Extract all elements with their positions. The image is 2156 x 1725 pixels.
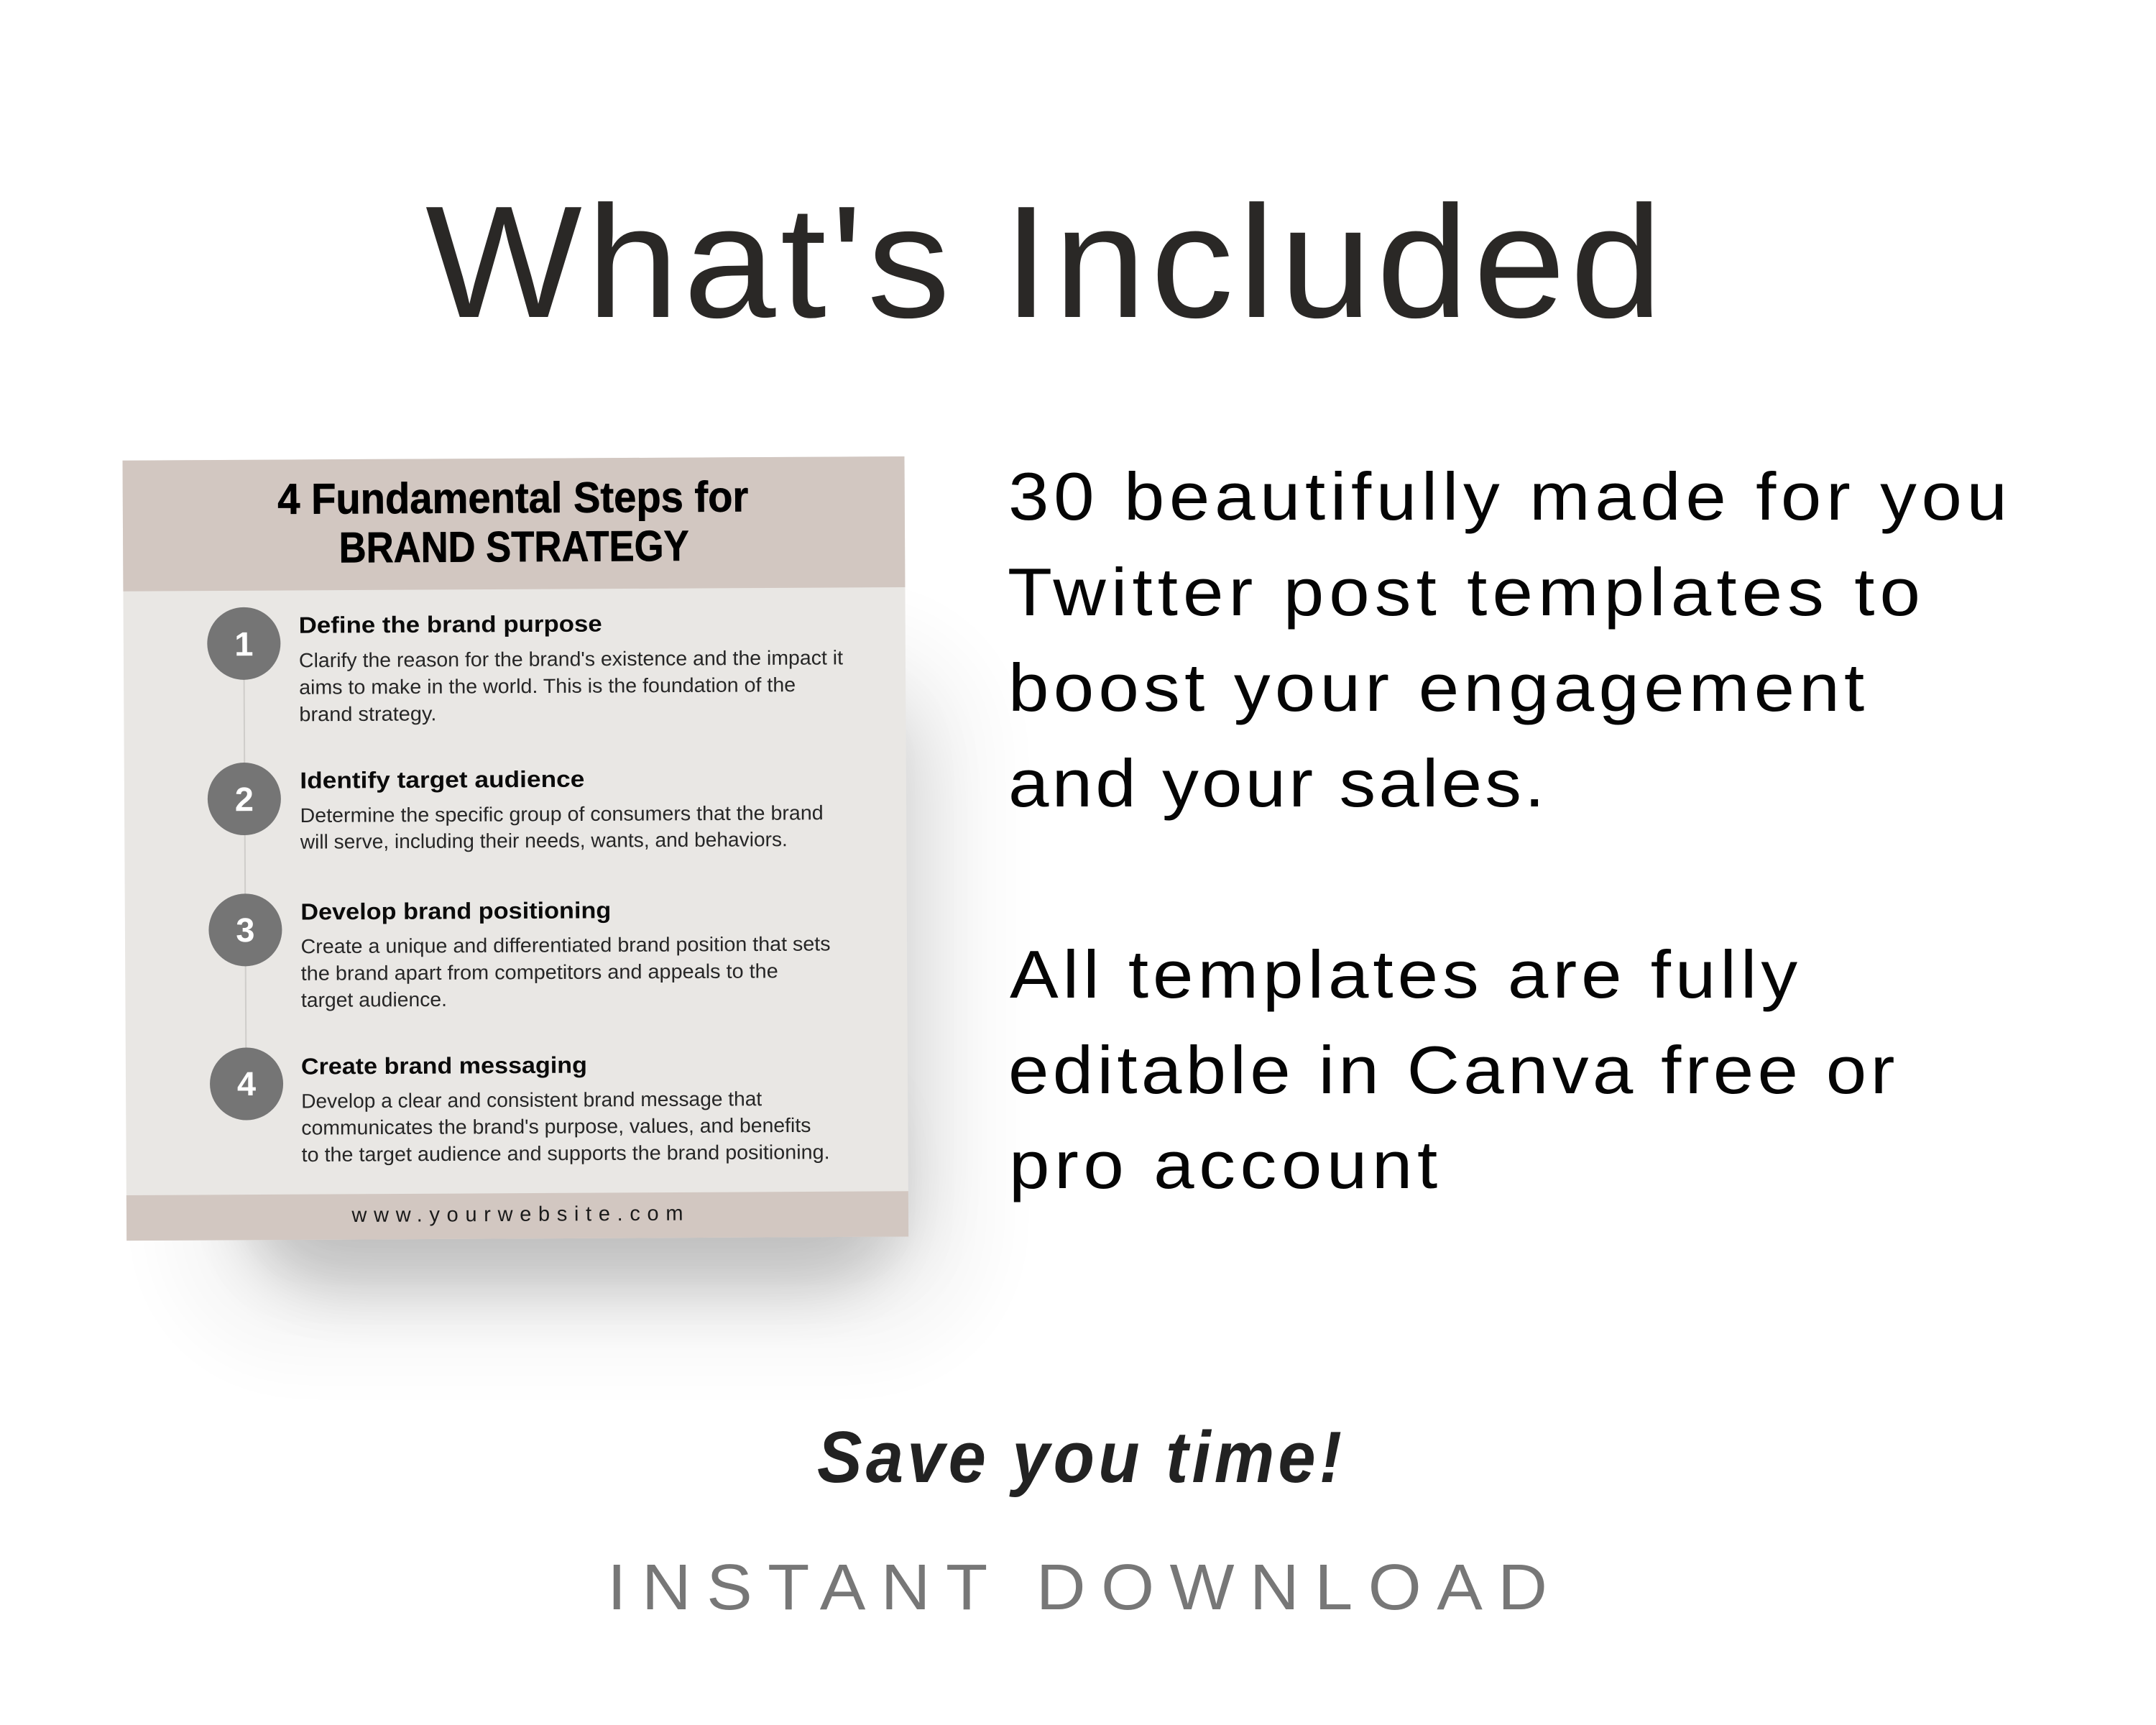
text block: template description bbox=[1008, 458, 2007, 821]
step 1: 1 bbox=[234, 625, 254, 663]
card heading bbox=[277, 472, 749, 572]
card heading: 4 Fundamental Steps for bbox=[277, 472, 748, 523]
step 4: 4 bbox=[237, 1064, 256, 1103]
card footer band bbox=[126, 1191, 908, 1241]
step 1: Clarify the reason for the brand's existence and the impact it bbox=[299, 646, 843, 671]
step 4: communicates the brand's purpose, values, and benefits bbox=[301, 1114, 811, 1139]
text block: editable in Canva: All templates are fully bbox=[1010, 936, 1797, 1012]
step 4: to the target audience and supports the brand positioning. bbox=[301, 1141, 830, 1166]
tagline: Save you time! bbox=[817, 1417, 1342, 1498]
step 4 bbox=[210, 1044, 830, 1167]
text block: template description: and your sales. bbox=[1008, 745, 1544, 821]
instant download label: INSTANT DOWNLOAD bbox=[607, 1550, 1547, 1623]
text block: editable in Canva bbox=[1008, 936, 1894, 1202]
card header band bbox=[122, 456, 905, 592]
step 3: 3 bbox=[236, 911, 255, 949]
step 2: Identify target audience bbox=[300, 766, 584, 794]
step 2: will serve, including their needs, wants, and behaviors. bbox=[300, 828, 788, 853]
step 3: target audience. bbox=[301, 988, 447, 1011]
step 4: Develop a clear and consistent brand message that bbox=[301, 1087, 762, 1113]
text block: editable in Canva: editable in Canva free or bbox=[1008, 1031, 1894, 1108]
card heading: BRAND STRATEGY bbox=[338, 522, 689, 571]
panel: brand strategy template card bbox=[122, 456, 908, 1241]
website address: www.yourwebsite.com bbox=[351, 1202, 683, 1227]
step 4: Create brand messaging bbox=[301, 1052, 587, 1080]
step 3: the brand apart from competitors and appeals to the bbox=[301, 960, 778, 985]
text block: template description: 30 beautifully made for you bbox=[1008, 458, 2007, 534]
step 1 bbox=[207, 604, 844, 726]
text block: editable in Canva: pro account bbox=[1009, 1126, 1437, 1202]
step 2 bbox=[208, 760, 824, 853]
text block: template description: boost your engagement bbox=[1008, 649, 1864, 725]
step 3: Create a unique and differentiated brand position that sets bbox=[300, 932, 831, 957]
card shadow bbox=[165, 618, 992, 1362]
step 3: Develop brand positioning bbox=[300, 897, 611, 925]
step 3 bbox=[208, 891, 831, 1012]
step 1: aims to make in the world. This is the foundation of the bbox=[299, 673, 796, 699]
step 2: 2 bbox=[235, 780, 254, 818]
connector line bbox=[244, 643, 247, 1084]
text block: template description: Twitter post templates to bbox=[1008, 553, 1920, 630]
step 2: Determine the specific group of consumers that the brand bbox=[300, 801, 824, 827]
step 1: Define the brand purpose bbox=[299, 611, 602, 638]
step 1: brand strategy. bbox=[299, 702, 436, 725]
title: What's Included bbox=[425, 172, 1662, 351]
